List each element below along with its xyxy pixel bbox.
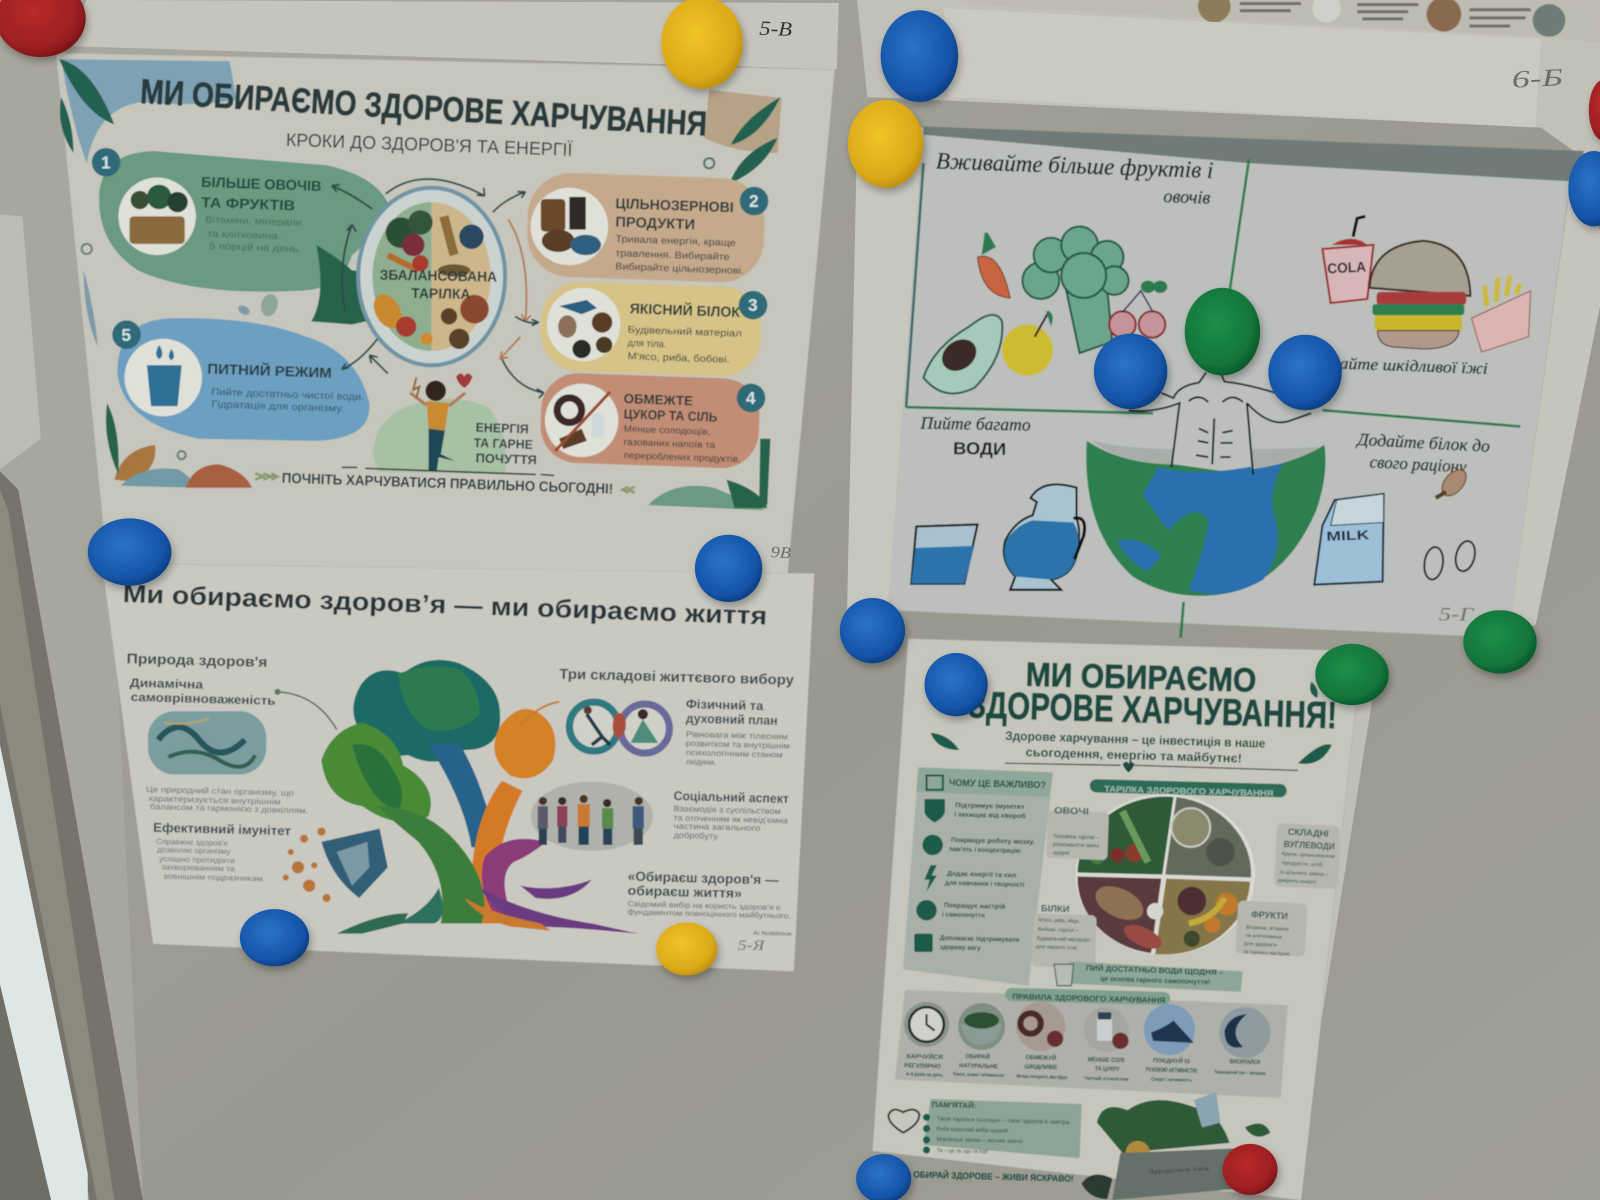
healthy plate chart bbox=[1076, 794, 1255, 955]
rules panel: ОБМЕЖУЙ bbox=[1025, 1053, 1056, 1062]
step 4 limit sugar and salt card: перероблених продуктів. bbox=[623, 450, 741, 464]
remember panel: Роби корисний вибір щодня! bbox=[937, 1126, 1009, 1134]
green magnet right bbox=[1463, 610, 1537, 673]
yellow magnet top bbox=[661, 0, 743, 89]
callouts: food groups: щодня bbox=[1053, 850, 1070, 857]
balanced plate: ТАРІЛКА bbox=[411, 286, 471, 303]
label: class 5-Г: 5-Г bbox=[1439, 604, 1475, 625]
yellow magnet bottom bbox=[656, 922, 717, 976]
red magnet right edge bbox=[1589, 80, 1600, 141]
step 1 vegetables card: 1 bbox=[101, 152, 111, 172]
handwritten: avoid harmful food: Уникайте шкідливої їжі bbox=[1302, 352, 1489, 378]
why it matters panel: пам'ять і концентрацію bbox=[949, 845, 1021, 855]
right column three components: Фізичний та bbox=[686, 696, 764, 713]
callouts: food groups: ВУГЛЕВОДИ bbox=[1284, 839, 1335, 852]
step 1 vegetables card: та клітковина. bbox=[207, 229, 281, 242]
drawing: glass and jug of water bbox=[911, 484, 1085, 590]
step 1 vegetables card: 5 порцій на день. bbox=[209, 241, 301, 255]
right column three components: та оточенням як невід'ємна bbox=[673, 813, 788, 825]
red magnet poster 3 bottom bbox=[1222, 1144, 1278, 1195]
step 5 water card: ПИТНИЙ РЕЖИМ bbox=[207, 359, 332, 382]
paper above poster 1 bbox=[61, 0, 839, 69]
rules panel: Повноцінний сон – запорука bbox=[1214, 1068, 1266, 1077]
rules panel: МЕНШЕ СОЛІ bbox=[1088, 1056, 1125, 1064]
step 4 limit sugar and salt card: ЦУКОР ТА СІЛЬ bbox=[623, 406, 718, 425]
step 2 whole grains card: Тривала енергія, краще bbox=[615, 234, 736, 249]
paper above class 6-Б sheet bbox=[944, 8, 1541, 128]
rules panel: ХАРЧУЙСЯ bbox=[906, 1052, 943, 1061]
callouts: food groups: ФРУКТИ bbox=[1251, 909, 1288, 921]
right column three components: «Обираєш здоров'я — bbox=[627, 869, 780, 888]
step 5 water card bbox=[112, 318, 370, 441]
tan corner shape bbox=[704, 90, 782, 153]
light square on the left bbox=[0, 214, 41, 469]
why it matters panel: Покращує настрій bbox=[944, 901, 1005, 911]
why it matters panel bbox=[903, 767, 1053, 986]
step 4 limit sugar and salt card: Менше солодощів, bbox=[623, 424, 710, 437]
step 2 whole grains card: 2 bbox=[749, 191, 759, 211]
water banner bbox=[1054, 961, 1243, 992]
arrows around the plate bbox=[332, 179, 544, 398]
bottom corner decorations bbox=[82, 158, 770, 510]
label: class 5-В: 5-В bbox=[759, 18, 792, 41]
step 5 water card: Гідратація для організму. bbox=[211, 399, 344, 415]
remember panel: Маленькі кроки – великі зміни bbox=[937, 1137, 1023, 1145]
right column three components: Три складові життєвого вибору bbox=[559, 667, 794, 689]
callouts: food groups: Крупи, цільнозернові bbox=[1282, 851, 1335, 860]
step 3 protein card: 3 bbox=[748, 295, 758, 315]
drawing: milk carton, eggs and drumstick bbox=[1314, 465, 1478, 585]
callouts: food groups: для здоров'я bbox=[1244, 941, 1277, 949]
balanced plate bbox=[358, 188, 505, 365]
blue magnet poster 3 bbox=[924, 653, 988, 716]
right column three components: добробуту. bbox=[673, 831, 720, 841]
corner leaves bbox=[59, 59, 114, 153]
metal frame bbox=[0, 471, 143, 1200]
left column nature of health bbox=[126, 651, 388, 902]
closing slogan: ОБИРАЙ ЗДОРОВЕ – ЖИВИ ЯСКРАВО! bbox=[913, 1169, 1074, 1184]
subtitle: КРОКИ ДО ЗДОРОВ'Я ТА ЕНЕРГІЇ bbox=[286, 129, 574, 160]
step 3 protein card: Будівельний матеріал bbox=[627, 325, 742, 340]
left column nature of health: дозволяє організму bbox=[157, 845, 231, 856]
remember panel: ПАМ'ЯТАЙ: bbox=[932, 1100, 977, 1110]
grocery bag illustration: Здорова їжа bbox=[1148, 1166, 1211, 1175]
green magnet on figure head bbox=[1185, 288, 1260, 376]
blue magnet right edge bbox=[1568, 151, 1600, 227]
callouts: food groups: із цільного зерна – bbox=[1279, 869, 1329, 878]
left column nature of health: захворюванням та bbox=[161, 862, 236, 873]
drawing: half earth bbox=[1086, 441, 1326, 596]
right column three components: частина загального bbox=[673, 822, 761, 833]
closing line: ПОЧНІТЬ ХАРЧУВАТИСЯ ПРАВИЛЬНО СЬОГОДНІ! bbox=[282, 471, 613, 498]
why it matters panel: Покращує роботу мозку, bbox=[951, 836, 1035, 846]
green grid lines bbox=[906, 159, 1520, 638]
callouts: food groups: БІЛКИ bbox=[1041, 903, 1070, 914]
step 4 limit sugar and salt card: 4 bbox=[746, 388, 756, 408]
step 2 whole grains card: травлення. Вибирайте bbox=[615, 248, 730, 263]
blue magnet top bbox=[881, 10, 958, 102]
left column nature of health: Динамічна bbox=[130, 676, 204, 692]
step 1 vegetables card: ТА ФРУКТІВ bbox=[201, 195, 295, 214]
wall left of posters bbox=[0, 31, 143, 1200]
left column nature of health: самоврівноваженість bbox=[131, 690, 276, 708]
rules panel: Менше солодкого, фастфуду bbox=[1016, 1073, 1068, 1081]
energy figure with good mood bbox=[372, 373, 537, 474]
why it matters panel: ЧОМУ ЦЕ ВАЖЛИВО? bbox=[949, 778, 1046, 791]
water banner: це основа гарного самопочуття! bbox=[1100, 975, 1210, 986]
leaves bbox=[931, 682, 1332, 764]
why it matters panel: Допомагає підтримувати bbox=[940, 934, 1020, 944]
callouts: food groups: ОВОЧІ bbox=[1054, 805, 1089, 816]
remember panel: Ти – це те, що ти їси! bbox=[937, 1148, 988, 1155]
right column three components: Ai Notebook bbox=[753, 931, 792, 938]
strip of another poster at the top right bbox=[949, 0, 1600, 43]
light reflection beside the drawing bbox=[1508, 179, 1600, 635]
step 2 whole grains card bbox=[526, 172, 768, 284]
subtitle: Здорове харчування – це інвестиція в наше bbox=[1005, 729, 1266, 751]
rules panel: ВИСИПАЙСЯ bbox=[1230, 1057, 1260, 1066]
handwritten: add protein: Додайте білок до bbox=[1355, 430, 1491, 456]
drawing: muscular figure outline bbox=[1129, 372, 1311, 474]
red magnet top left bbox=[0, 0, 86, 57]
grocery bag illustration bbox=[1082, 1092, 1270, 1200]
left column nature of health: балансом та гармонією з довкіллям. bbox=[150, 802, 308, 815]
right column three components: обираєш життя» bbox=[627, 883, 742, 901]
rules panel: 4–5 разів на день bbox=[906, 1072, 943, 1078]
step 3 protein card: М'ясо, риба, бобові. bbox=[627, 351, 730, 366]
right column three components bbox=[531, 667, 794, 938]
right column three components: Соціальний аспект bbox=[673, 788, 789, 806]
blue magnet bottom left bbox=[240, 909, 309, 966]
left column nature of health: успішно протидіяти bbox=[159, 854, 235, 865]
handwritten heading: fruits and vegetables: Вживайте більше фруктів і bbox=[936, 148, 1214, 184]
right corner leaves bbox=[730, 97, 781, 184]
title: МИ ОБИРАЄМО bbox=[1025, 657, 1257, 700]
callouts: food groups: СКЛАДНІ bbox=[1288, 827, 1329, 839]
step 1 vegetables card: БІЛЬШЕ ОВОЧІВ bbox=[201, 175, 322, 195]
step 3 protein card: ЯКІСНИЙ БІЛОК bbox=[629, 299, 741, 321]
callouts: food groups: та гарного настрою bbox=[1243, 949, 1290, 958]
drawing: vegetables and fruits bbox=[923, 227, 1167, 393]
drawing: junk food bbox=[1322, 216, 1531, 352]
healthy plate heading pill: ТАРІЛКА ЗДОРОВОГО ХАРЧУВАННЯ bbox=[1104, 784, 1274, 798]
label: class 9В: 9В bbox=[770, 542, 792, 562]
rules panel: Спорт і активність bbox=[1151, 1077, 1192, 1084]
why it matters panel: і самопочуття bbox=[942, 910, 985, 919]
blue magnet poster 3 bottom bbox=[856, 1154, 911, 1200]
step 5 water card: Пийте достатньо чистої води. bbox=[211, 387, 364, 403]
step 4 limit sugar and salt card: газованих напоїв та bbox=[623, 437, 716, 450]
callouts: food groups: будівельний матеріал bbox=[1037, 935, 1090, 944]
left column nature of health: зовнішнім подразникам. bbox=[163, 872, 265, 883]
label: class 6-Б: 6-Б bbox=[1511, 64, 1564, 94]
why it matters panel: Додає енергії та сил bbox=[947, 870, 1016, 879]
blue magnet figure right fist bbox=[1268, 335, 1342, 410]
right column three components: людини. bbox=[686, 757, 716, 767]
rules panel: ПОЄДНУЙ ІЗ bbox=[1153, 1056, 1190, 1065]
right column three components: Взаємодія з суспільством bbox=[673, 804, 781, 816]
callouts: food groups: бобові, горіхи – bbox=[1038, 927, 1079, 934]
handwritten: drink water: Пийте багато bbox=[919, 414, 1031, 434]
decorative corner blob bbox=[61, 59, 237, 163]
callouts: food groups: М'ясо, риба, яйця, bbox=[1039, 916, 1080, 925]
callouts: food groups: продукти, хліб bbox=[1282, 860, 1323, 868]
fold shadow across the top bbox=[923, 127, 1584, 182]
panel: poster 3 healthy eating plate: сьогодення, енергію та майбутнє! bbox=[1025, 745, 1242, 766]
step 2 whole grains card: ЦІЛЬНОЗЕРНОВІ bbox=[615, 196, 734, 216]
left column nature of health: Ефективний імунітет bbox=[153, 820, 291, 838]
drawing: junk food: COLA bbox=[1327, 259, 1366, 277]
callouts: food groups: джерело енергії bbox=[1277, 878, 1317, 886]
remember panel bbox=[889, 1099, 1082, 1158]
green magnet poster 3 bbox=[1315, 644, 1389, 705]
panel: poster 2 choose health choose life bbox=[102, 563, 814, 971]
callouts: food groups: Вітаміни, вітаміни bbox=[1246, 925, 1289, 933]
rules panel: РУХОВОЮ АКТИВНІСТЮ bbox=[1146, 1066, 1198, 1075]
top right sheet bbox=[857, 0, 1600, 153]
title: МИ ОБИРАЄМО ЗДОРОВЕ ХАРЧУВАННЯ bbox=[139, 73, 708, 144]
bright window strip bbox=[0, 745, 88, 1200]
step 2 whole grains card: Вибирайте цільнозернові. bbox=[615, 261, 744, 277]
left column nature of health: Це природний стан організму, що bbox=[146, 785, 295, 798]
rules panel: ОБИРАЙ bbox=[965, 1052, 990, 1061]
rules panel: Читай етикетки bbox=[1084, 1075, 1129, 1083]
step 1 vegetables card: Вітаміни, мінерали bbox=[205, 214, 302, 229]
step 3 protein card: для тіла. bbox=[627, 338, 667, 350]
left column nature of health: характеризується внутрішнім bbox=[148, 794, 281, 807]
light reflection beside poster 3 bbox=[1265, 653, 1380, 1200]
left column nature of health: Справжнє здоров'я bbox=[156, 837, 228, 848]
step 4 limit sugar and salt card: ОБМЕЖТЕ bbox=[623, 391, 693, 408]
right column three components: Рівновага між тілесним bbox=[686, 730, 788, 741]
why it matters panel: здорову вагу bbox=[940, 944, 981, 952]
yellow magnet drawing corner bbox=[848, 100, 923, 188]
step 3 protein card bbox=[539, 280, 767, 378]
rules panel: НАТУРАЛЬНЕ bbox=[959, 1062, 998, 1070]
right column three components: розвитком та внутрішнім bbox=[686, 739, 790, 751]
drawing: milk carton, eggs and drumstick: MILK bbox=[1326, 527, 1370, 544]
energy figure with good mood: ТА ГАРНЕ bbox=[473, 435, 533, 452]
healthy plate heading pill bbox=[1090, 779, 1287, 798]
right column three components: фундаментом повноцінного майбутнього. bbox=[627, 907, 791, 921]
right column three components: духовний план bbox=[686, 710, 778, 728]
balanced plate: ЗБАЛАНСОВАНА bbox=[380, 268, 497, 286]
panel: poster 3 healthy eating plate: ЗДОРОВЕ ХАРЧУВАННЯ! bbox=[967, 683, 1338, 736]
panel: class drawing poster: овочів bbox=[1163, 186, 1211, 208]
rules panel: РЕГУЛЯРНО bbox=[904, 1062, 941, 1070]
panel: class drawing poster bbox=[888, 127, 1584, 638]
callouts: food groups: різноманітні овочі bbox=[1053, 842, 1099, 850]
tree illustration bbox=[321, 660, 638, 934]
step 2 whole grains card: ПРОДУКТИ bbox=[615, 215, 695, 233]
right column three components: психологічним станом bbox=[686, 748, 783, 760]
label: class 5-Я: 5-Я bbox=[738, 938, 766, 954]
panel: poster 3 healthy eating plate bbox=[872, 639, 1362, 1200]
callouts: food groups: Половина тарілки – bbox=[1053, 834, 1100, 841]
rules panel: ПРАВИЛА ЗДОРОВОГО ХАРЧУВАННЯ bbox=[1012, 992, 1165, 1005]
step 5 water card: 5 bbox=[121, 325, 131, 345]
blue magnet figure left fist bbox=[1094, 334, 1167, 409]
rules panel bbox=[895, 988, 1288, 1098]
callouts: food groups: для нашого тіла bbox=[1036, 944, 1077, 951]
step 1 vegetables card bbox=[92, 148, 403, 324]
rules panel: Овочі, злаки і мінімально bbox=[953, 1072, 1004, 1079]
blue magnet left of poster 2 bbox=[88, 518, 171, 586]
rules panel: ШКІДЛИВЕ bbox=[1024, 1063, 1057, 1071]
energy figure with good mood: ЕНЕРГІЯ bbox=[475, 420, 529, 436]
panel: poster 1 healthy eating steps bbox=[56, 53, 835, 573]
title: Ми обираємо здоров’я — ми обираємо життя bbox=[122, 580, 768, 631]
rules panel: ТА ЦУКРУ bbox=[1095, 1065, 1120, 1073]
energy figure with good mood: ПОЧУТТЯ bbox=[475, 450, 537, 467]
panel: class drawing poster: ВОДИ bbox=[953, 438, 1006, 459]
right column three components: Свідомий вибір на користь здоров'я є bbox=[627, 899, 781, 912]
blue magnet divider bbox=[840, 598, 905, 663]
panel: class drawing poster: свого раціону bbox=[1369, 452, 1467, 476]
why it matters panel: для навчання і творчості bbox=[945, 879, 1025, 889]
why it matters panel: і захищає від хвороб bbox=[954, 810, 1026, 820]
remember panel: Твоя тарілка сьогодні – твоє здоров'я завтра bbox=[937, 1116, 1070, 1126]
why it matters panel: Підтримує імунітет bbox=[955, 801, 1025, 811]
water banner: ПИЙ ДОСТАТНЬО ВОДИ ЩОДНЯ – bbox=[1086, 963, 1224, 977]
callouts: food groups bbox=[1032, 805, 1340, 968]
blue magnet centre bbox=[695, 535, 762, 602]
left column nature of health: Природа здоров'я bbox=[126, 651, 268, 671]
step 4 limit sugar and salt card bbox=[539, 372, 765, 469]
callouts: food groups: та клітковина bbox=[1245, 933, 1282, 941]
